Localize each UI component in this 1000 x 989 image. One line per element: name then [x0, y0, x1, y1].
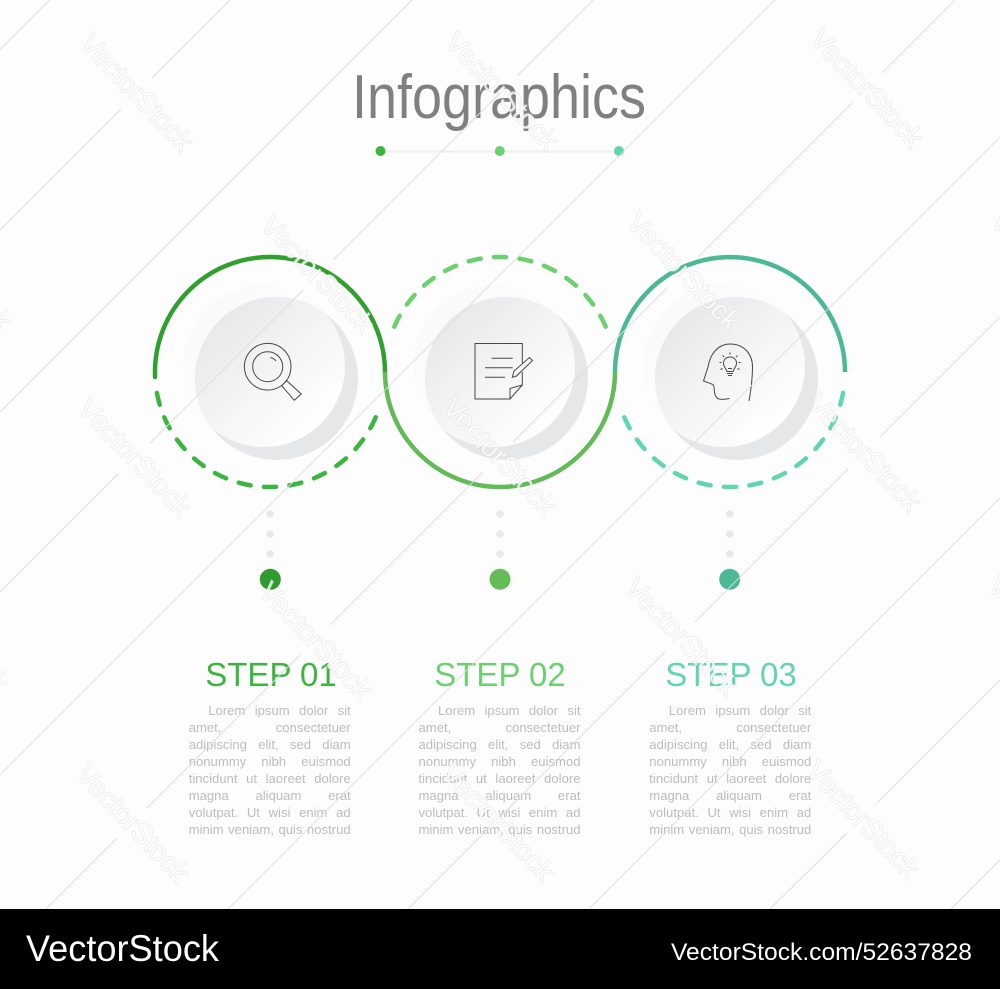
icon: head with light bulb — [704, 344, 752, 401]
text block: step 01: amet, consectetuer — [189, 720, 351, 735]
text block: step 01: tincidunt ut laoreet dolore — [189, 771, 351, 786]
heading: step 01: STEP 01 — [205, 656, 337, 693]
disc 1 — [195, 297, 358, 460]
ring 3: solid top arc and dashed bottom arc — [615, 257, 845, 487]
text block: step 03: minim veniam, quis nostrud — [649, 822, 811, 837]
watermarks: VectorStock — [437, 391, 563, 522]
heading: step 03: STEP 03 — [665, 656, 797, 693]
watermarks: VectorStock — [435, 757, 561, 888]
text block: step 03: magna aliquam erat — [649, 788, 811, 803]
watermarks: VectorStock — [72, 392, 198, 523]
text block: step 02 — [418, 703, 580, 837]
ring 1: solid top arc and dashed bottom arc — [155, 257, 385, 487]
disc 3 — [655, 297, 818, 460]
footer bar — [0, 909, 1000, 989]
text block: step 02: nonummy nibh euismod — [418, 754, 580, 769]
text block: step 02: adipiscing elit, sed diam — [418, 737, 580, 752]
text block: step 02: tincidunt ut laoreet dolore — [418, 771, 580, 786]
text block: step 03: adipiscing elit, sed diam — [649, 737, 811, 752]
watermarks: VectorStock — [804, 23, 930, 154]
watermarks: VectorStock — [800, 754, 926, 885]
watermarks: VectorStock — [439, 26, 565, 157]
text block: step 03 — [649, 703, 812, 837]
heading: step 02: STEP 02 — [434, 656, 566, 693]
text block: step 01 — [188, 703, 351, 837]
watermarks: VectorStock — [74, 27, 200, 158]
text block: step 02: Lorem ipsum dolor sit — [438, 703, 580, 718]
text block: step 03: Lorem ipsum dolor sit — [669, 703, 811, 718]
watermarks: VectorStock — [802, 387, 928, 518]
watermarks: VectorStock — [70, 758, 196, 889]
text block: step 03: nonummy nibh euismod — [649, 754, 811, 769]
text block: step 01: adipiscing elit, sed diam — [189, 737, 351, 752]
text block: step 02: volutpat. Ut wisi enim ad — [418, 805, 580, 820]
text block: step 01: magna aliquam erat — [189, 788, 351, 803]
connector dots: step 3 — [719, 510, 740, 590]
text block: step 01: nonummy nibh euismod — [189, 754, 351, 769]
title: Infographics — [352, 63, 646, 132]
ring 2: solid bottom arc and dashed top arc — [385, 257, 615, 487]
icon: magnifying glass — [244, 343, 301, 400]
text block: step 01: volutpat. Ut wisi enim ad — [189, 805, 351, 820]
watermarks: VectorStock — [253, 575, 379, 706]
watermarks: VectorStock — [621, 206, 747, 337]
text block: step 03: amet, consectetuer — [649, 720, 811, 735]
text block: step 02: minim veniam, quis nostrud — [418, 822, 580, 837]
watermarks: VectorStock — [255, 209, 381, 340]
text block: step 01: Lorem ipsum dolor sit — [208, 703, 351, 718]
connector dots: step 1 — [260, 510, 281, 590]
text block: step 03: tincidunt ut laoreet dolore — [649, 771, 811, 786]
footer image id: VectorStock.com/52637828 — [671, 939, 972, 966]
text block: step 02: magna aliquam erat — [418, 788, 580, 803]
footer brand: VectorStock — [26, 927, 219, 969]
title divider with three dots — [376, 146, 624, 156]
connector dots: step 2 — [490, 510, 510, 590]
text block: step 03: volutpat. Ut wisi enim ad — [649, 805, 811, 820]
text block: step 02: amet, consectetuer — [418, 720, 580, 735]
text block: step 01: minim veniam, quis nostrud — [189, 822, 351, 837]
watermarks: VectorStock — [619, 571, 745, 702]
disc 2 — [425, 297, 588, 460]
icon: document with pencil — [475, 344, 532, 399]
